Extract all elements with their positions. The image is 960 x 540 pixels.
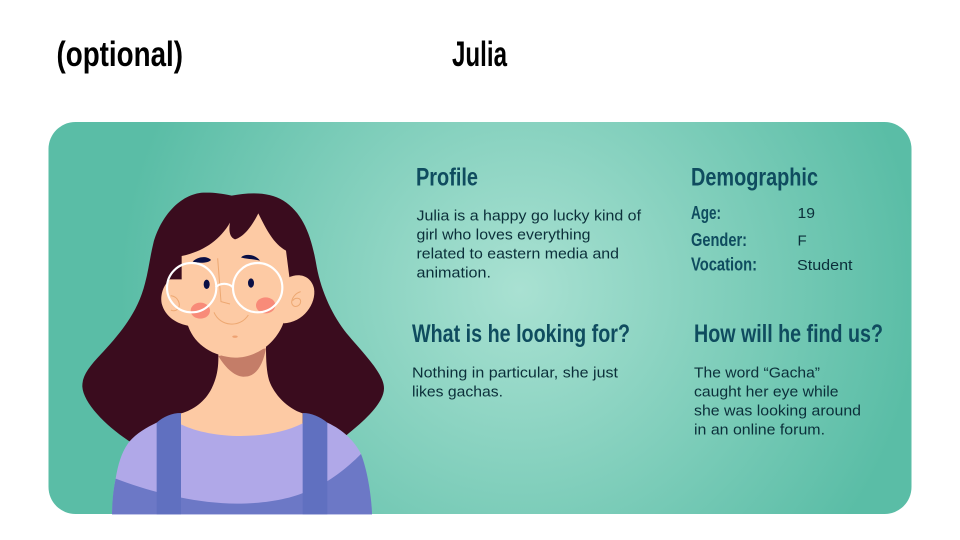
illustration: Julia portrait (82, 193, 384, 514)
vocation row (691, 254, 853, 274)
face (182, 213, 289, 358)
text: profile body: girl who loves everything (416, 226, 590, 244)
text: find us body: The word “Gacha” (694, 364, 820, 382)
title: persona name: Julia (452, 35, 507, 74)
neck shadow (218, 348, 266, 377)
overall straps (157, 413, 327, 514)
mouth mark (232, 335, 238, 338)
panel: persona card (48, 122, 912, 514)
title: optional: (optional) (56, 35, 183, 74)
shirt (112, 423, 372, 514)
nose and smile lines (214, 258, 248, 324)
text: looking for body: Nothing in particular, she just (412, 364, 619, 382)
age row: 19 (798, 205, 815, 222)
gender row (691, 230, 807, 250)
eyebrows (193, 257, 211, 263)
left ear (161, 279, 203, 326)
glasses (167, 263, 282, 312)
text: profile body: Julia is a happy go lucky kind of (416, 208, 642, 224)
gender row: Gender: (691, 230, 747, 250)
vocation row: Vocation: (691, 254, 757, 274)
age row: Age: (691, 203, 721, 223)
ear details (171, 292, 301, 311)
text: find us body (694, 364, 861, 438)
vocation row: Student (797, 257, 853, 274)
text: profile body: related to eastern media and (416, 246, 619, 262)
text: profile body: animation. (416, 264, 491, 282)
text: find us body: in an online forum. (694, 422, 825, 438)
gender row: F (798, 232, 807, 250)
demographic table (691, 203, 853, 274)
neck (181, 347, 303, 447)
text: profile body (416, 208, 642, 282)
text: find us body: she was looking around (694, 402, 861, 420)
text: looking for body: likes gachas. (412, 384, 503, 400)
heading: demographic: Demographic (691, 164, 818, 192)
right ear (277, 275, 314, 323)
heading: profile: Profile (416, 164, 478, 192)
text: find us body: caught her eye while (694, 384, 838, 400)
shirt lower band (112, 454, 372, 514)
cheeks (191, 303, 210, 319)
age row (691, 203, 815, 223)
heading: how will he find us: How will he find us? (694, 320, 883, 348)
heading: what is he looking for: What is he looking for? (412, 320, 630, 348)
text: looking for body (412, 364, 619, 400)
eyes (204, 280, 210, 289)
hair (82, 193, 384, 442)
